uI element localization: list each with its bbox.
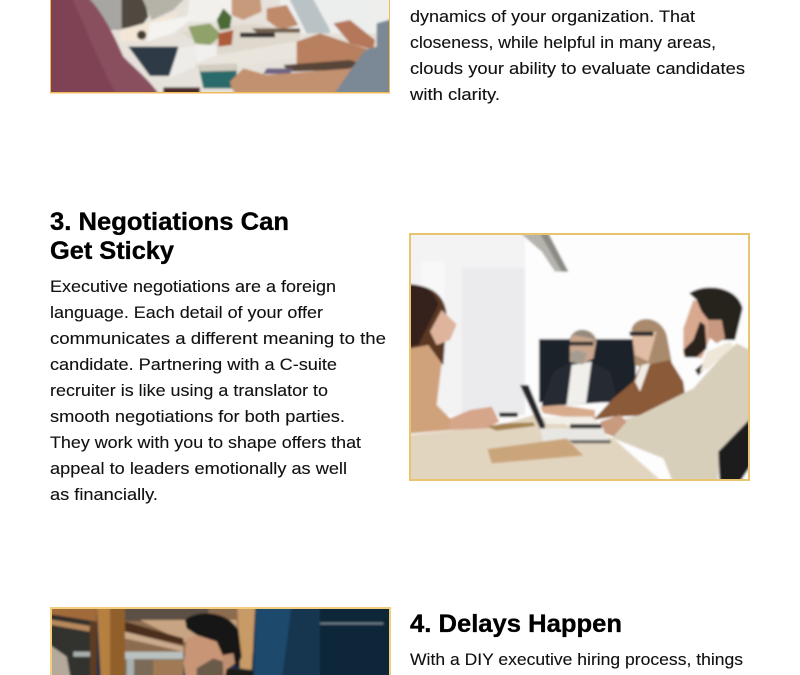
text: negotiations paragraph: smooth negotiations for both parties. bbox=[50, 407, 345, 426]
text: negotiations paragraph: candidate. Partnering with a C-suite bbox=[50, 355, 337, 374]
text: negotiations paragraph: They work with you to shape offers that bbox=[50, 433, 361, 452]
heading: 3. Negotiations Can Get Sticky: 3. Negotiations Can bbox=[50, 208, 289, 236]
heading: 3. Negotiations Can Get Sticky: Get Sticky bbox=[50, 237, 174, 265]
photo: team meeting around a table bbox=[50, 0, 390, 94]
text: negotiations paragraph: language. Each detail of your offer bbox=[50, 303, 323, 322]
text: intro paragraph ending: closeness, while helpful in many areas, bbox=[410, 33, 716, 52]
text: intro paragraph ending: with clarity. bbox=[409, 85, 500, 104]
heading: 3. Negotiations Can Get Sticky bbox=[50, 208, 289, 265]
text: negotiations paragraph: Executive negotiations are a foreign bbox=[50, 277, 336, 296]
text: negotiations paragraph: recruiter is like using a translator to bbox=[50, 381, 328, 400]
text: negotiations paragraph: communicates a different meaning to the bbox=[50, 329, 386, 348]
photo: bearded man looking out of a window bbox=[50, 607, 391, 675]
text: negotiations paragraph bbox=[50, 277, 386, 504]
text: delays paragraph start: With a DIY executive hiring process, things bbox=[410, 650, 743, 669]
heading: 4. Delays Happen: 4. Delays Happen bbox=[410, 610, 622, 638]
photo: job candidate facing three interviewers bbox=[409, 233, 750, 481]
text: intro paragraph ending: clouds your ability to evaluate candidates bbox=[410, 59, 745, 78]
text: negotiations paragraph: appeal to leaders emotionally as well bbox=[50, 459, 347, 478]
text: intro paragraph ending bbox=[409, 7, 745, 104]
text: negotiations paragraph: as financially. bbox=[50, 485, 158, 504]
text: intro paragraph ending: dynamics of your organization. That bbox=[410, 7, 695, 26]
